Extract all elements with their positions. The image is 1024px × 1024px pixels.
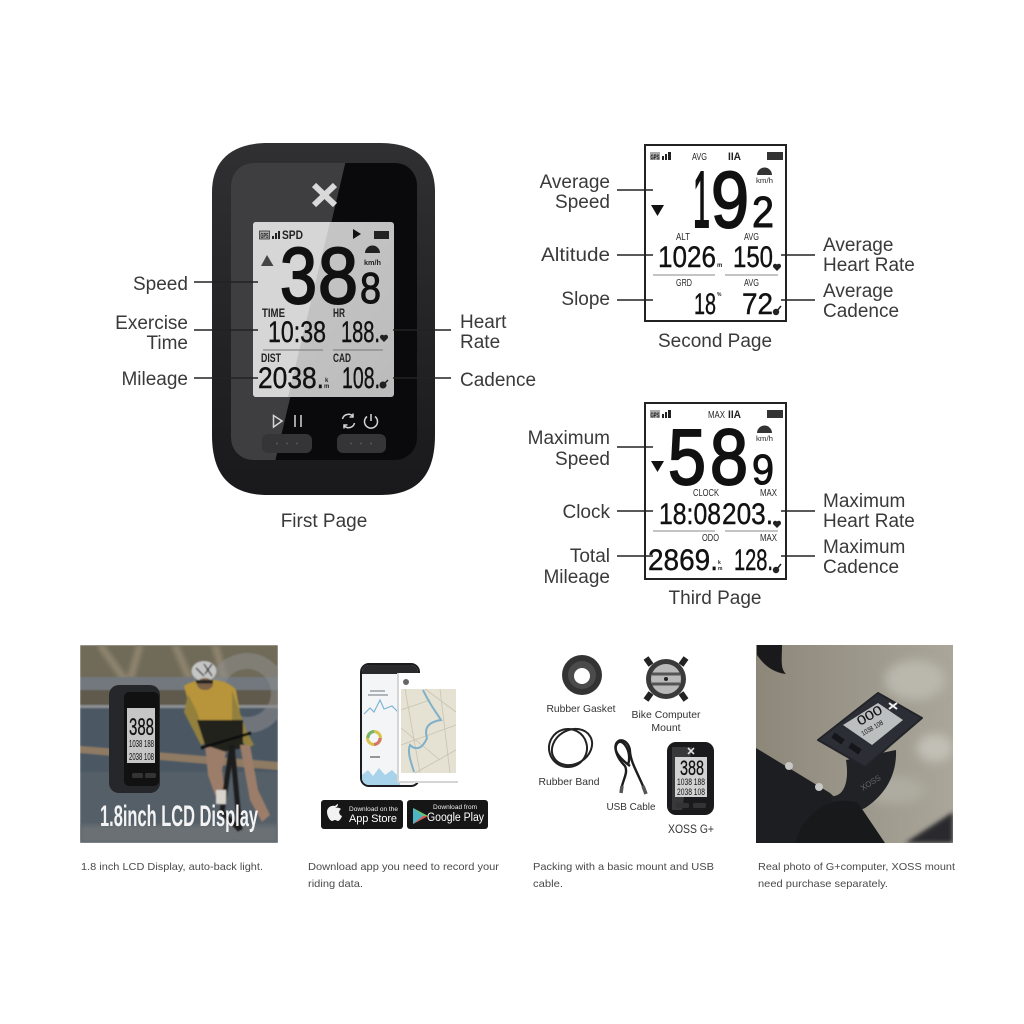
rubber gasket — [562, 655, 602, 695]
caption: download app — [308, 861, 500, 890]
caption: real photo: need purchase separately. — [758, 878, 888, 890]
device: first page bike computer — [212, 143, 435, 495]
status row: IIA — [728, 409, 741, 421]
third page callouts — [528, 428, 915, 588]
mini XOSS device: 388 — [680, 757, 704, 780]
caption: real photo — [758, 861, 955, 890]
exercise time label: Time — [146, 333, 188, 354]
average cadence field: 72 — [742, 288, 773, 321]
time field: TIME — [262, 308, 285, 320]
illustration: package contents: XOSS G+ — [668, 822, 714, 836]
panel: second page screen — [645, 145, 786, 321]
average heart rate field: AVG — [744, 232, 759, 243]
illustration: mobile app and store badges — [321, 663, 488, 829]
odometer field: k — [718, 560, 721, 566]
speed reading: 8 — [318, 231, 358, 320]
status row — [650, 151, 783, 163]
clock field: 18:08 — [659, 498, 721, 531]
speed triangle up — [261, 255, 274, 266]
km/h unit: km/h — [364, 258, 381, 267]
maximum speed reading: 8 — [710, 412, 748, 501]
slope label: Slope — [561, 289, 610, 310]
maximum speed reading: 5 — [668, 412, 706, 501]
illustration: package contents: USB Cable — [606, 801, 656, 813]
device casing — [212, 143, 435, 495]
button icons — [274, 414, 378, 428]
photo: G+ computer on bike mount — [756, 645, 953, 843]
clock label: Clock — [562, 502, 610, 523]
map card — [397, 673, 458, 783]
status row — [650, 409, 783, 421]
exercise time label: Exercise — [115, 313, 188, 334]
caption: real photo: Real photo of G+computer, XOSS mount — [758, 861, 955, 873]
USB cable — [615, 740, 646, 794]
device face — [225, 160, 417, 462]
heart rate field: HR — [333, 308, 345, 320]
distance field: k — [325, 378, 329, 384]
second page callouts — [540, 172, 915, 322]
illustration: package contents: Rubber Gasket — [546, 703, 616, 715]
slope field: 18 — [694, 288, 716, 321]
time field — [262, 308, 326, 349]
caption: packing: cable. — [533, 878, 563, 890]
slope field: GRD — [676, 278, 692, 289]
status row: MAX — [708, 410, 725, 421]
physical buttons — [262, 434, 386, 453]
handlebar and mount: XOSS — [859, 773, 882, 793]
average speed label: Speed — [555, 192, 610, 213]
gauge and unit: km/h — [756, 178, 773, 185]
maximum cadence label: Maximum — [823, 537, 905, 558]
slope field — [676, 278, 722, 321]
altitude field: ALT — [676, 232, 690, 243]
maximum heart rate field: 203. — [722, 498, 773, 531]
second page caption: Second Page — [658, 331, 772, 352]
Google Play badge: Download from — [433, 804, 477, 811]
maximum speed label: Maximum — [528, 428, 610, 449]
clock field: CLOCK — [693, 488, 719, 499]
cadence field — [333, 353, 388, 395]
maximum speed label: Speed — [555, 449, 610, 470]
average cadence label: Average — [823, 281, 893, 302]
cadence field: 108. — [342, 362, 380, 395]
mini XOSS device: 2038 108 — [677, 787, 705, 797]
total mileage label: Total — [570, 546, 610, 567]
first page caption: First Page — [281, 511, 367, 532]
mounted device: 1038 108 — [860, 720, 885, 738]
average speed reading: 9 — [711, 155, 749, 244]
first page callouts — [115, 274, 536, 391]
altitude field: 1026 — [658, 241, 716, 274]
cadence field: CAD — [333, 353, 351, 365]
gauge and unit: km/h — [756, 436, 773, 443]
small device: 2038 108 — [129, 752, 154, 763]
caption: packing: Packing with a basic mount and USB — [533, 861, 714, 873]
maximum cadence field — [734, 533, 781, 577]
leader lines — [617, 190, 815, 300]
average cadence label: Cadence — [823, 301, 899, 322]
average speed reading: 2 — [752, 188, 774, 237]
Google Play badge — [407, 800, 488, 829]
clock field — [659, 488, 721, 531]
smartphone — [360, 663, 420, 787]
average speed reading: 1 — [693, 155, 710, 244]
maximum speed reading — [668, 412, 774, 501]
maximum cadence label: Cadence — [823, 557, 899, 578]
caption: LCD display: 1.8 inch LCD Display, auto-back light. — [81, 861, 263, 873]
illustration: package contents: Rubber Band — [538, 776, 600, 788]
speed reading — [280, 231, 381, 320]
mounted device: 000 — [854, 702, 885, 729]
maximum cadence field: MAX — [760, 533, 777, 544]
panel: third page screen — [645, 403, 786, 579]
small device: 388 — [129, 714, 154, 741]
leader lines — [194, 282, 451, 378]
odometer field: 2869. — [648, 544, 718, 577]
blurred background — [756, 645, 953, 843]
caption: packing — [533, 861, 714, 890]
heart rate field — [333, 308, 388, 349]
bike computer mount — [646, 658, 686, 700]
slope field: % — [717, 292, 722, 298]
status row — [260, 228, 389, 242]
App Store badge — [321, 800, 403, 829]
caption: download app: Download app you need to record your — [308, 861, 500, 873]
average speed reading — [693, 155, 774, 244]
illustration: package contents — [538, 655, 714, 836]
distance field: 2038. — [258, 362, 324, 395]
handlebar and mount — [756, 748, 896, 843]
speed label: Speed — [133, 274, 188, 295]
cadence label: Cadence — [460, 370, 536, 391]
average heart rate field: 150 — [733, 241, 773, 274]
average heart rate label: Average — [823, 235, 893, 256]
mileage label: Mileage — [121, 369, 188, 390]
dividers — [263, 349, 383, 351]
status row: IIA — [728, 151, 741, 163]
maximum heart rate label: Maximum — [823, 491, 905, 512]
status row: AVG — [692, 152, 707, 163]
gauge icon — [365, 246, 380, 253]
maximum heart rate field: MAX — [760, 488, 777, 499]
small device: 1038 188 — [129, 739, 154, 750]
overlay title: 1.8inch LCD Display — [100, 800, 258, 833]
small device — [109, 685, 160, 793]
maximum heart rate label: Heart Rate — [823, 511, 915, 532]
gauge and unit — [756, 426, 773, 443]
heart rate field: 188. — [341, 316, 380, 349]
status row: GPS — [260, 233, 269, 240]
status row: GPS — [650, 412, 660, 420]
captions — [81, 861, 955, 890]
distance field: m — [324, 384, 329, 390]
caption: download app: riding data. — [308, 878, 363, 890]
altitude field: m — [717, 263, 722, 269]
heart rate label: Heart — [460, 312, 506, 333]
XOSS X logo — [314, 185, 335, 205]
maximum cadence field: 128. — [734, 544, 773, 577]
illustration: package contents: Bike Computer — [632, 709, 701, 721]
LCD screen — [253, 222, 394, 397]
speed reading: 8 — [360, 264, 381, 313]
odometer field: ODO — [702, 533, 719, 544]
total mileage label: Mileage — [543, 567, 610, 588]
App Store badge: App Store — [349, 813, 397, 825]
odometer field: m — [718, 566, 723, 572]
average heart rate label: Heart Rate — [823, 255, 915, 276]
mini XOSS device: 1038 188 — [677, 777, 705, 787]
third page caption: Third Page — [669, 588, 761, 609]
distance field: DIST — [261, 353, 281, 365]
gauge and unit — [756, 168, 773, 185]
altitude label: Altitude — [541, 245, 610, 266]
time field: 10:38 — [268, 316, 326, 349]
trend triangle down — [651, 461, 664, 472]
cyclist — [184, 661, 270, 830]
average cadence field — [742, 278, 781, 321]
Google Play badge: Google Play — [427, 812, 484, 824]
mounted device — [818, 693, 922, 767]
average speed label: Average — [540, 172, 610, 193]
leader lines — [617, 447, 815, 556]
maximum speed reading: 9 — [752, 446, 774, 494]
heart rate label: Rate — [460, 332, 500, 353]
photo: cyclist with 1.8 inch LCD display — [80, 645, 279, 843]
scene background — [80, 645, 279, 843]
trend triangle down — [651, 205, 664, 216]
mini XOSS device — [667, 742, 714, 815]
illustration: package contents: Mount — [651, 722, 681, 734]
speed reading: 3 — [280, 231, 317, 320]
status row: GPS — [650, 154, 660, 162]
status row: SPD — [282, 228, 303, 242]
average cadence field: AVG — [744, 278, 759, 289]
rubber band — [545, 722, 599, 772]
App Store badge: Download on the — [349, 806, 398, 813]
